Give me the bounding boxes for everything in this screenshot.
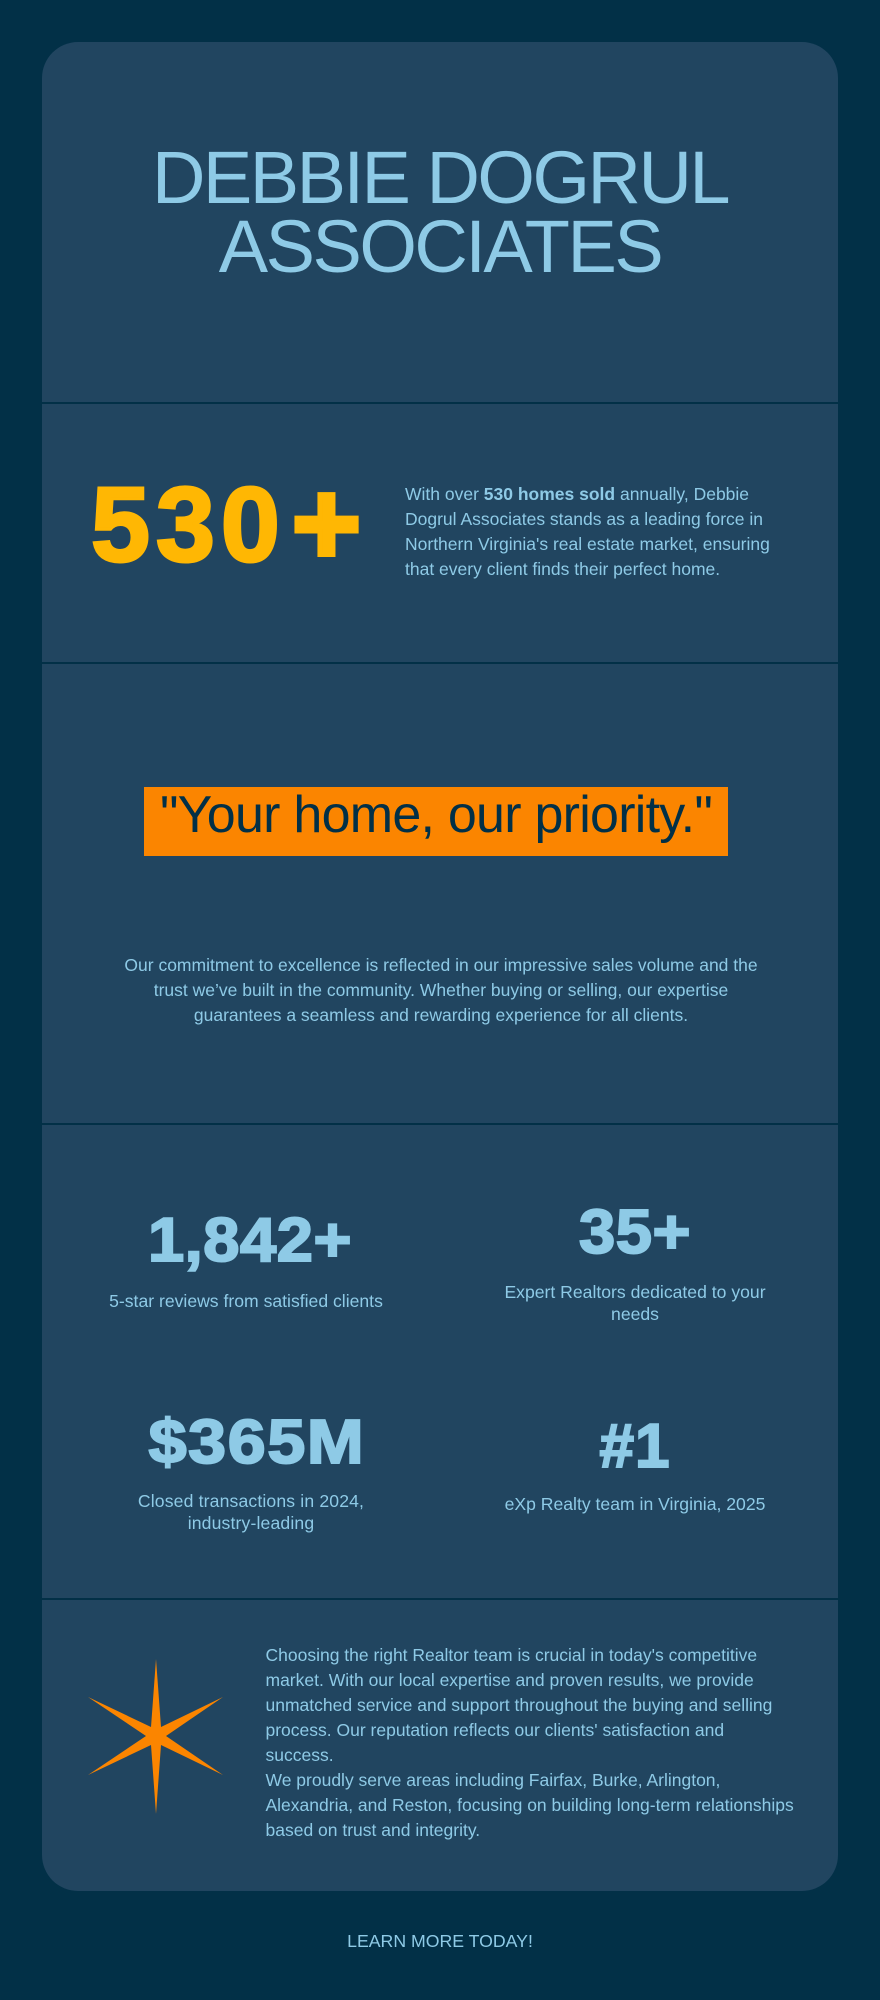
stat: 35+ realtors: needs [611, 1304, 659, 1324]
closing paragraph: Alexandria, and Reston, focusing on building long-term relationships [266, 1795, 794, 1815]
stat: 35+ realtors: 35+ [579, 1198, 691, 1267]
stat: $365M closed: Closed transactions in 2024, [138, 1491, 364, 1511]
title [152, 136, 728, 288]
homes sold description: Dogrul Associates stands as a leading force in [405, 509, 763, 529]
title: DEBBIE DOGRUL [152, 136, 728, 219]
commitment paragraph: trust we’ve built in the community. Whether buying or selling, our expertise [154, 980, 728, 1000]
homes sold description: Northern Virginia's real estate market, ensuring [405, 534, 770, 554]
stat: $365M closed: $365M [148, 1408, 365, 1477]
closing paragraph: We proudly serve areas including Fairfax, Burke, Arlington, [266, 1770, 720, 1790]
big number: 530+: 530 [91, 466, 286, 584]
closing paragraph: success. [266, 1745, 334, 1765]
big number: 530+: + [292, 458, 361, 590]
commitment paragraph [124, 955, 758, 1025]
closing paragraph: based on trust and integrity. [266, 1820, 480, 1840]
stat: 35+ realtors [504, 1198, 766, 1324]
stat: $365M closed [138, 1408, 365, 1533]
closing paragraph: Choosing the right Realtor team is crucial in today's competitive [266, 1645, 757, 1665]
stat: #1 team: #1 [600, 1412, 670, 1481]
homes sold description [405, 484, 770, 579]
footer call to action: LEARN MORE TODAY! [347, 1931, 533, 1951]
big number: 530+ [91, 458, 361, 590]
homes sold description: With over 530 homes sold annually, Debbie [405, 484, 749, 504]
quote banner: "Your home, our priority." [160, 786, 712, 844]
commitment paragraph: guarantees a seamless and rewarding experience for all clients. [194, 1005, 688, 1025]
stat: $365M closed: industry-leading [188, 1513, 314, 1533]
stat: #1 team: eXp Realty team in Virginia, 2025 [505, 1494, 765, 1514]
closing paragraph: market. With our local expertise and proven results, we provide [266, 1670, 754, 1690]
closing paragraph [266, 1645, 794, 1840]
stat: 1,842+ reviews: 5-star reviews from satisfied clients [109, 1291, 383, 1311]
closing paragraph: process. Our reputation reflects our clients' satisfaction and [266, 1720, 724, 1740]
stat: 35+ realtors: Expert Realtors dedicated to your [504, 1282, 766, 1302]
icon: orange six-point star [88, 1660, 223, 1814]
closing paragraph: unmatched service and support throughout the buying and selling [266, 1695, 772, 1715]
homes sold description: that every client finds their perfect home. [405, 559, 720, 579]
stat: #1 team [505, 1412, 765, 1514]
commitment paragraph: Our commitment to excellence is reflected in our impressive sales volume and the [124, 955, 758, 975]
title: ASSOCIATES [219, 204, 661, 288]
stat: 1,842+ reviews [109, 1206, 383, 1311]
stat: 1,842+ reviews: 1,842+ [148, 1206, 352, 1274]
